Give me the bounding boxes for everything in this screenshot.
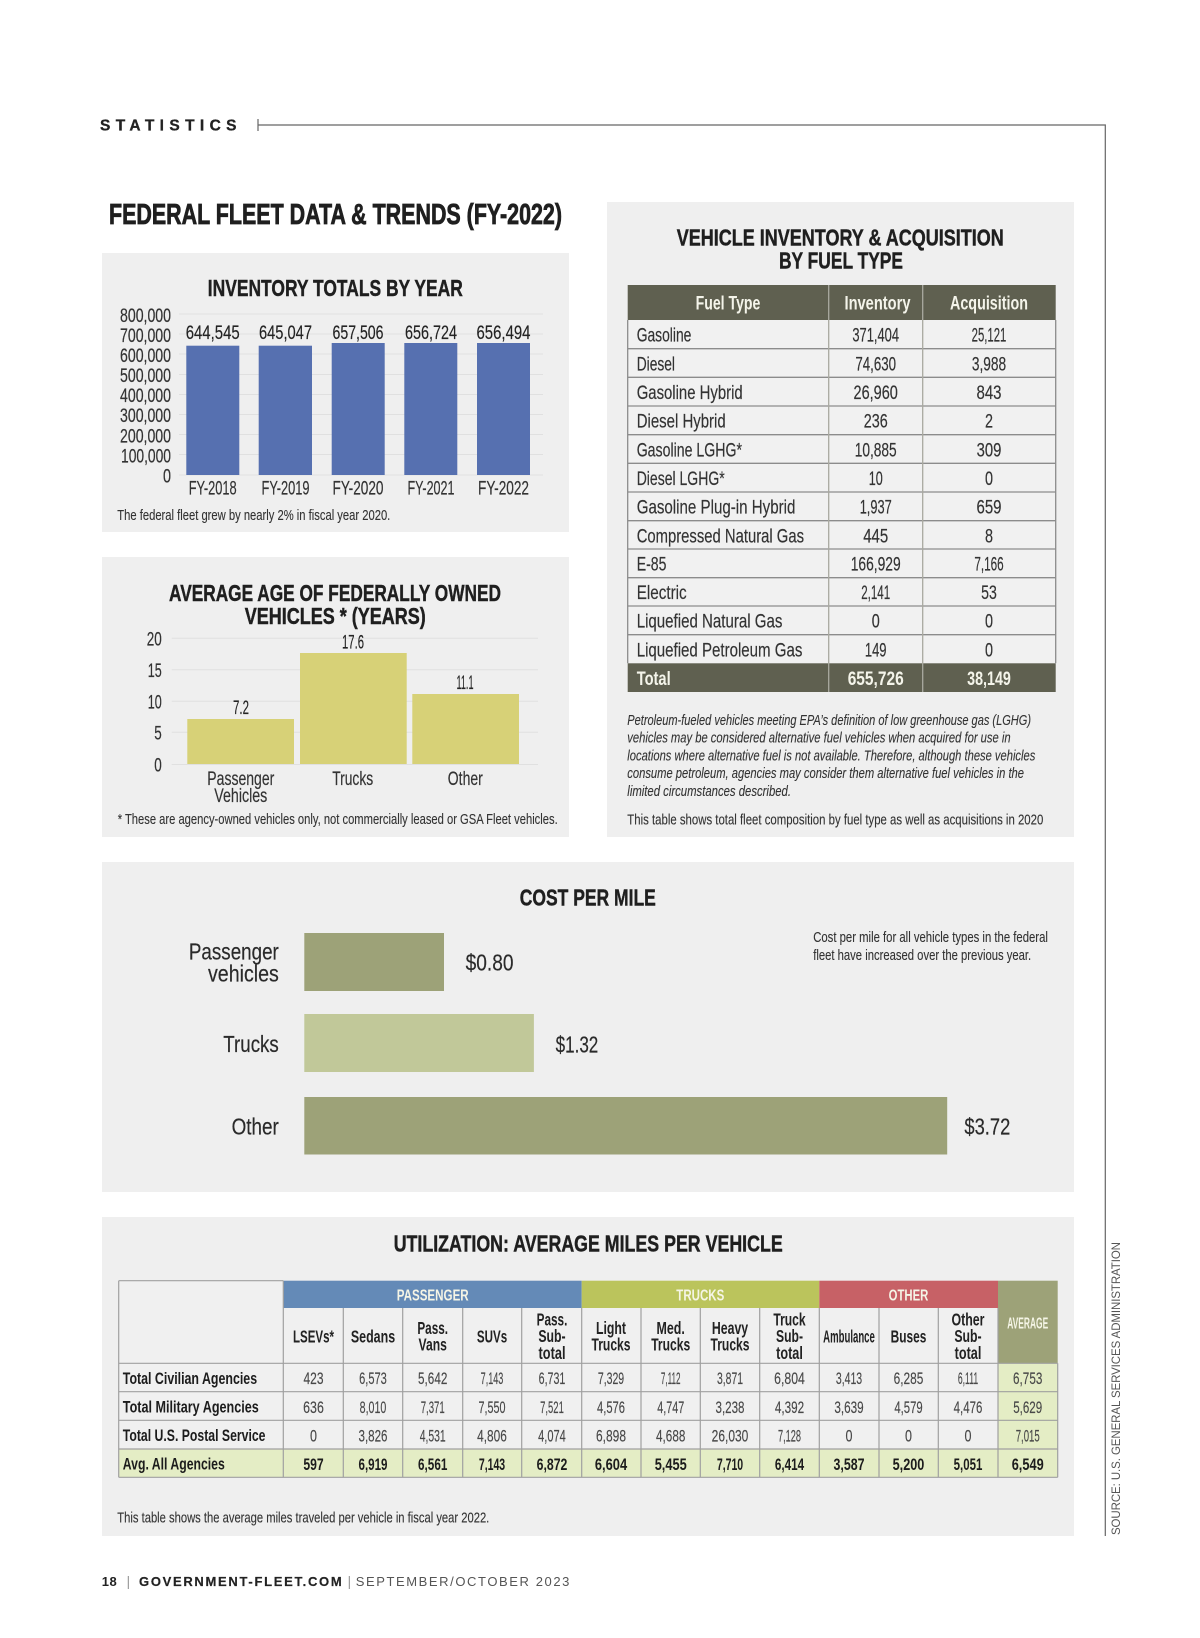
table: fuel type: 659 xyxy=(976,498,1002,519)
table: fuel type: Fuel Type xyxy=(696,293,760,314)
table column headers: Pass. xyxy=(417,1318,448,1338)
bar chart: average age: Other xyxy=(448,769,483,790)
table row: total military agencies: 4,392 xyxy=(775,1398,804,1417)
table row: total U.S. postal service: 0 xyxy=(964,1426,972,1446)
table row: total military agencies: 4,579 xyxy=(894,1398,923,1417)
source credit: SOURCE: U.S. GENERAL SERVICES ADMINISTRATION xyxy=(1111,1242,1123,1535)
note: cost per mile increase xyxy=(813,929,1048,964)
table row: average all agencies: 597 xyxy=(303,1455,324,1474)
note: LGHG definition xyxy=(627,712,1036,800)
heading: vehicle inventory: VEHICLE INVENTORY & ACQUISITION xyxy=(677,225,1004,251)
table row: total U.S. postal service: 4,074 xyxy=(538,1426,566,1446)
bar chart: inventory totals: 656,724 xyxy=(405,323,457,344)
table: fuel type: 309 xyxy=(977,440,1001,461)
table row: total U.S. postal service: 4,806 xyxy=(477,1426,507,1446)
table: fuel type: 3,988 xyxy=(972,354,1006,375)
panel: inventory totals by year xyxy=(102,253,569,532)
table row: total military agencies xyxy=(123,1398,1042,1417)
table row: average all agencies: 6,604 xyxy=(595,1455,628,1474)
note: cost per mile increase: fleet have increased over the previous year. xyxy=(813,947,1031,964)
table: fuel type: 1,937 xyxy=(860,498,892,519)
note: LGHG definition: locations where alternative fuel is not available. Therefore, although these vehicles xyxy=(627,747,1036,764)
table group headers: AVERAGE xyxy=(1007,1316,1048,1333)
table: fuel type: 26,960 xyxy=(854,383,898,404)
bar chart: inventory totals: 100,000 xyxy=(121,446,171,468)
table column headers: Buses xyxy=(891,1327,927,1347)
table row: average all agencies: 6,872 xyxy=(537,1455,567,1474)
panel: average age of federally owned vehicles xyxy=(102,557,569,837)
table: fuel type: Compressed Natural Gas xyxy=(637,526,804,547)
table: fuel type: Gasoline LGHG* xyxy=(637,440,742,461)
table: fuel type: 7,166 xyxy=(974,555,1004,576)
bar chart: average age: 11.1 xyxy=(456,673,474,694)
bar chart: inventory totals: 0 xyxy=(163,467,171,488)
table row: total U.S. postal service: 0 xyxy=(310,1426,317,1446)
table column headers: Ambulance xyxy=(823,1327,875,1347)
table row: total civilian agencies: 423 xyxy=(304,1369,324,1388)
table column headers: SUVs xyxy=(477,1327,507,1347)
table row: average all agencies: 3,587 xyxy=(834,1455,864,1474)
table: fuel type: Liquefied Petroleum Gas xyxy=(637,640,802,661)
table row: average all agencies: 6,561 xyxy=(418,1455,447,1474)
table row: total civilian agencies: 3,413 xyxy=(836,1369,862,1388)
table row: total U.S. postal service: Total U.S. Postal Service xyxy=(123,1426,266,1445)
table: fuel type: 0 xyxy=(985,469,993,490)
table row: total civilian agencies: 6,285 xyxy=(894,1369,923,1388)
heading: vehicle inventory xyxy=(677,225,1004,274)
table row: total civilian agencies: 6,111 xyxy=(958,1369,978,1388)
table: fuel type: 38,149 xyxy=(967,669,1011,690)
bar chart: inventory totals: FY-2021 xyxy=(408,479,454,500)
bar chart: inventory totals: 600,000 xyxy=(120,346,171,367)
table column headers: Truck xyxy=(773,1309,806,1329)
table: fuel type: Total xyxy=(637,669,671,690)
table row: average all agencies: 5,455 xyxy=(655,1455,687,1474)
table: fuel type: Liquefied Natural Gas xyxy=(637,612,782,633)
main title: FEDERAL FLEET DATA & TRENDS (FY-2022) xyxy=(109,199,562,231)
table row: average all agencies: 5,051 xyxy=(954,1455,982,1474)
table row: total U.S. postal service: 26,030 xyxy=(712,1426,748,1446)
table row: total U.S. postal service: 4,688 xyxy=(656,1426,685,1446)
note: cost per mile increase: Cost per mile for all vehicle types in the federal xyxy=(813,929,1048,946)
table row: total military agencies: Total Military Agencies xyxy=(123,1398,259,1416)
table: fuel type: E-85 xyxy=(637,555,666,576)
bar chart: average age: Passenger xyxy=(207,769,275,790)
bar chart: cost per mile: vehicles xyxy=(208,961,279,987)
section header: statistics: STATISTICS xyxy=(100,118,236,135)
table column headers: total xyxy=(955,1343,981,1363)
note: LGHG definition: limited circumstances described. xyxy=(627,783,791,800)
table row: average all agencies: Avg. All Agencies xyxy=(123,1455,225,1474)
table row: total U.S. postal service: 7,128 xyxy=(778,1426,801,1446)
note: LGHG definition: consume petroleum, agencies may consider them alternative fuel vehicles in the xyxy=(627,765,1024,782)
table row: total civilian agencies: Total Civilian Agencies xyxy=(123,1369,257,1388)
table: fuel type: Diesel LGHG* xyxy=(637,469,725,490)
bar chart: cost per mile: $3.72 xyxy=(964,1113,1010,1139)
table row: average all agencies: 6,919 xyxy=(358,1455,388,1474)
footer: SEPTEMBER/OCTOBER 2023 xyxy=(356,1574,569,1589)
table: fuel type: 2,141 xyxy=(861,583,890,604)
table: fuel type: 74,630 xyxy=(855,354,896,375)
footnote: agency-owned: * These are agency-owned vehicles only, not commercially leased or GSA Fleet vehicles. xyxy=(118,811,558,828)
table row: total civilian agencies: 6,753 xyxy=(1013,1369,1042,1388)
bar chart: cost per mile: Other xyxy=(232,1113,279,1139)
table column headers: Trucks xyxy=(710,1335,750,1355)
table group headers: OTHER xyxy=(889,1288,929,1305)
bar chart: average age: 7.2 xyxy=(233,698,249,719)
bar chart: average age: 17.6 xyxy=(342,632,364,653)
footer: 18 xyxy=(102,1574,117,1589)
table: fuel type: 166,929 xyxy=(851,555,901,576)
bar chart: cost per mile: Trucks xyxy=(223,1031,279,1057)
table row: total U.S. postal service: 4,531 xyxy=(420,1426,446,1446)
bar chart: cost per mile xyxy=(189,933,1010,1154)
bar chart: cost per mile: $1.32 xyxy=(556,1032,598,1058)
table: fuel type: 0 xyxy=(985,612,993,633)
bar chart: inventory totals: FY-2018 xyxy=(189,479,237,500)
table row: total civilian agencies: 3,871 xyxy=(717,1369,743,1388)
table column headers: Light xyxy=(596,1318,626,1338)
table: fuel type: 655,726 xyxy=(848,669,904,690)
table row: total U.S. postal service: 7,015 xyxy=(1016,1426,1040,1446)
table row: total military agencies: 3,639 xyxy=(834,1398,864,1417)
table column headers: Sedans xyxy=(351,1327,395,1347)
table column headers: Trucks xyxy=(592,1335,631,1355)
table row: average all agencies xyxy=(123,1455,1044,1474)
table column headers: Pass. xyxy=(537,1309,567,1329)
bar chart: inventory totals: 645,047 xyxy=(259,323,312,344)
table row: average all agencies: 6,414 xyxy=(775,1455,805,1474)
table: fuel type: Diesel Hybrid xyxy=(637,412,726,433)
heading: average age: AVERAGE AGE OF FEDERALLY OWNED xyxy=(169,580,501,606)
table: fuel type: 25,121 xyxy=(972,326,1006,347)
table row: total military agencies: 7,371 xyxy=(421,1398,445,1417)
table row: total civilian agencies: 5,642 xyxy=(418,1369,447,1388)
table row: average all agencies: 7,143 xyxy=(479,1455,505,1474)
table row: total military agencies: 636 xyxy=(303,1398,324,1417)
table column headers: Heavy xyxy=(712,1318,748,1338)
table: fuel type xyxy=(628,285,1056,692)
heading: vehicle inventory: BY FUEL TYPE xyxy=(779,248,903,274)
table row: total military agencies: 8,010 xyxy=(360,1398,386,1417)
table row: total military agencies: 4,576 xyxy=(597,1398,625,1417)
bar chart: inventory totals: 300,000 xyxy=(120,406,171,427)
table row: total U.S. postal service: 6,898 xyxy=(596,1426,626,1446)
bar chart: inventory totals: 700,000 xyxy=(120,326,171,347)
table group headers xyxy=(397,1288,1048,1333)
bar chart: inventory totals: 657,506 xyxy=(332,323,384,344)
bar chart: inventory totals: 400,000 xyxy=(120,386,171,407)
table row: total civilian agencies: 6,573 xyxy=(359,1369,387,1388)
table: fuel type: 53 xyxy=(981,583,997,604)
heading: cost per mile: COST PER MILE xyxy=(520,885,656,911)
heading: average age: VEHICLES * (YEARS) xyxy=(245,603,426,629)
table column headers: total xyxy=(776,1343,803,1363)
table group headers: PASSENGER xyxy=(397,1288,469,1305)
table row: average all agencies: 7,710 xyxy=(717,1455,743,1474)
bar chart: inventory totals: 644,545 xyxy=(186,323,240,344)
panel: utilization average miles per vehicle xyxy=(102,1217,1074,1536)
bar chart: cost per mile: $0.80 xyxy=(466,950,514,976)
table: fuel type: Gasoline Hybrid xyxy=(637,383,743,404)
table row: total military agencies: 7,550 xyxy=(478,1398,506,1417)
table column headers: Med. xyxy=(657,1318,685,1338)
table row: average all agencies: 6,549 xyxy=(1012,1455,1044,1474)
table: fuel type: 149 xyxy=(865,640,887,661)
table column headers: LSEVs* xyxy=(293,1327,334,1347)
bar chart: inventory totals: FY-2019 xyxy=(262,479,310,500)
table: utilization xyxy=(119,1281,1058,1477)
footer: GOVERNMENT-FLEET.COM xyxy=(139,1574,342,1589)
table: fuel type: 10,885 xyxy=(855,440,897,461)
table column headers: Other xyxy=(952,1309,985,1329)
bar chart: inventory totals: FY-2020 xyxy=(332,479,384,500)
table row: total military agencies: 4,747 xyxy=(657,1398,684,1417)
table column headers: Sub- xyxy=(538,1326,566,1346)
table row: total civilian agencies xyxy=(123,1369,1042,1388)
table row: total civilian agencies: 7,329 xyxy=(598,1369,624,1388)
table row: total military agencies: 4,476 xyxy=(954,1398,982,1417)
bar chart: average age xyxy=(147,630,538,807)
bar chart: inventory totals: FY-2022 xyxy=(478,479,529,500)
table row: total civilian agencies: 7,143 xyxy=(481,1369,503,1388)
note: LGHG definition: Petroleum-fueled vehicles meeting EPA’s definition of low greenhouse gas (LGHG) xyxy=(627,712,1031,729)
heading: average age xyxy=(169,580,501,629)
table column headers: total xyxy=(538,1343,566,1363)
bar chart: average age: 5 xyxy=(154,724,162,745)
bar chart: average age: 20 xyxy=(147,630,162,651)
bar chart: inventory totals xyxy=(120,306,543,500)
table: fuel type: 843 xyxy=(976,383,1002,404)
table row: total military agencies: 3,238 xyxy=(716,1398,744,1417)
table column headers: Sub- xyxy=(776,1326,803,1346)
note: LGHG definition: vehicles may be considered alternative fuel vehicles when acquired for use in xyxy=(627,730,1011,747)
note: table description: This table shows total fleet composition by fuel type as well as acquisitions in 2020 xyxy=(627,811,1043,828)
table: fuel type: Diesel xyxy=(637,354,675,375)
table row: total military agencies: 5,629 xyxy=(1013,1398,1042,1417)
table column headers: Sub- xyxy=(954,1326,982,1346)
bar chart: inventory totals: 200,000 xyxy=(120,426,171,448)
bar chart: inventory totals: 500,000 xyxy=(120,366,171,387)
table: fuel type: Inventory xyxy=(844,293,911,314)
table row: total civilian agencies: 7,112 xyxy=(661,1369,681,1388)
table: fuel type: 2 xyxy=(985,412,993,433)
table row: total civilian agencies: 6,731 xyxy=(539,1369,565,1388)
table row: total U.S. postal service: 0 xyxy=(905,1426,912,1446)
bar chart: average age: 0 xyxy=(154,756,162,777)
table row: total U.S. postal service xyxy=(123,1426,1040,1446)
table: fuel type: Gasoline xyxy=(637,326,691,347)
table group headers: TRUCKS xyxy=(676,1288,725,1305)
table: fuel type: 236 xyxy=(864,412,888,433)
bar chart: inventory totals: 800,000 xyxy=(120,306,171,327)
note: average miles description: This table shows the average miles traveled per vehicle in fiscal year 2022. xyxy=(117,1510,489,1527)
table row: total civilian agencies: 6,804 xyxy=(774,1369,805,1388)
bar chart: inventory totals: 656,494 xyxy=(476,323,531,344)
panel: cost per mile xyxy=(102,862,1074,1192)
panel: vehicle inventory and acquisition by fuel type xyxy=(607,202,1074,837)
table row: total U.S. postal service: 0 xyxy=(846,1426,852,1446)
table column headers: Trucks xyxy=(651,1335,690,1355)
table: fuel type: Electric xyxy=(637,583,687,604)
table: fuel type: Gasoline Plug-in Hybrid xyxy=(637,498,795,519)
table row: total U.S. postal service: 3,826 xyxy=(358,1426,388,1446)
table column headers xyxy=(293,1309,985,1363)
table: fuel type: 371,404 xyxy=(852,326,899,347)
bar chart: average age: 10 xyxy=(148,693,162,714)
table: fuel type: 0 xyxy=(985,640,993,661)
table: fuel type: 445 xyxy=(863,526,888,547)
bar chart: average age: Trucks xyxy=(332,769,373,790)
table: fuel type: 10 xyxy=(869,469,883,490)
table row: average all agencies: 5,200 xyxy=(893,1455,924,1474)
table: fuel type: 0 xyxy=(872,612,880,633)
table: fuel type: Acquisition xyxy=(950,293,1028,314)
table row: total military agencies: 7,521 xyxy=(540,1398,564,1417)
bar chart: cost per mile: Passenger xyxy=(189,938,279,964)
heading: inventory totals: INVENTORY TOTALS BY YEAR xyxy=(208,275,463,301)
heading: utilization: UTILIZATION: AVERAGE MILES PER VEHICLE xyxy=(394,1231,783,1257)
footer xyxy=(102,1574,569,1589)
note: fleet growth: The federal fleet grew by nearly 2% in fiscal year 2020. xyxy=(117,507,390,524)
table column headers: Vans xyxy=(419,1335,447,1355)
table: fuel type: 8 xyxy=(985,526,993,547)
bar chart: average age: 15 xyxy=(148,661,162,682)
bar chart: average age: Vehicles xyxy=(214,786,267,807)
